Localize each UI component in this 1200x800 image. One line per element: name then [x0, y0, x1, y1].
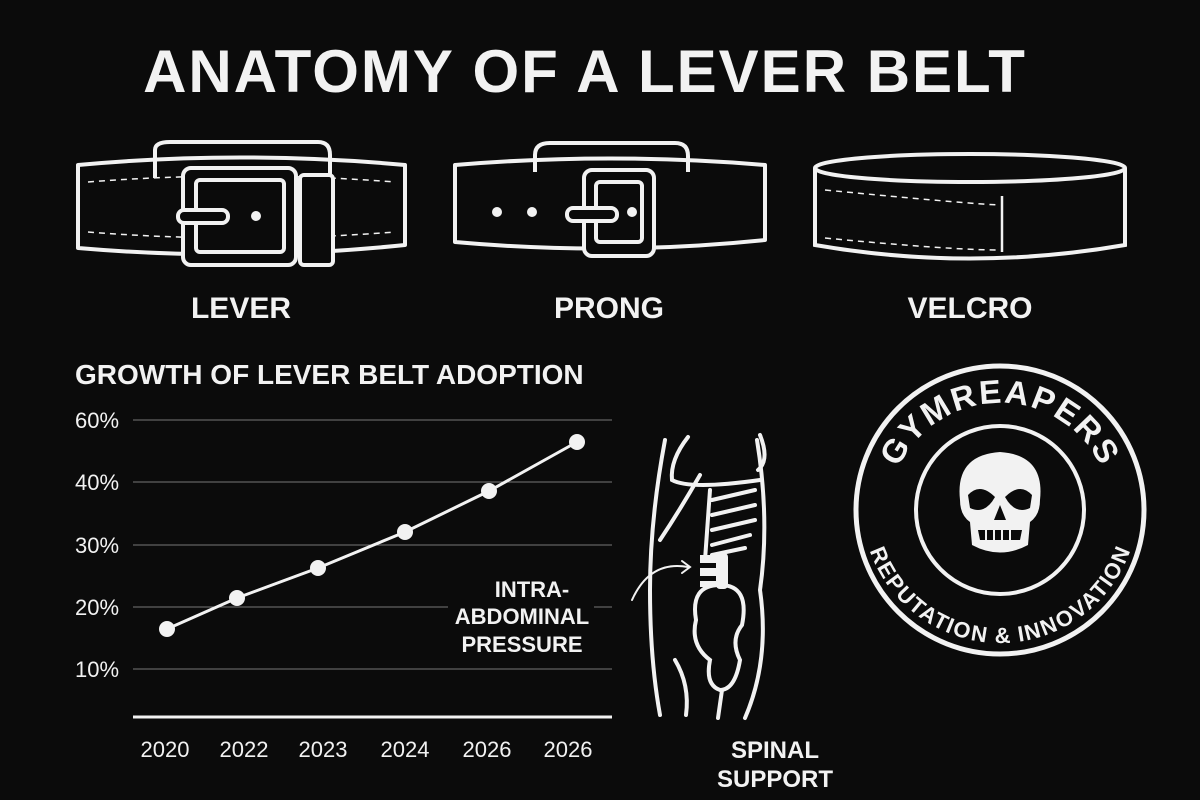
line chart: 2026 [544, 737, 592, 762]
label: spinal support: SUPPORT [717, 766, 833, 793]
label: velcro: VELCRO [907, 292, 1033, 325]
line chart: 40% [75, 470, 119, 495]
line chart: 30% [75, 533, 119, 558]
line chart: 60% [75, 408, 119, 433]
logo: gymreapers badge: REPUTATION & INNOVATION [870, 546, 1130, 644]
line chart: 10% [75, 657, 119, 682]
logo: gymreapers badge: GYMREAPERS [882, 380, 1118, 463]
logo: gymreapers badge [854, 364, 1146, 656]
line chart: 2023 [299, 737, 347, 762]
icon: velcro belt [815, 154, 1125, 258]
line chart: 2026 [463, 737, 511, 762]
line chart: 20% [75, 595, 119, 620]
icon: vertebrae [700, 553, 728, 589]
chart title: GROWTH OF LEVER BELT ADOPTION [75, 359, 584, 390]
callout: intra-abdominal pressure [448, 573, 594, 663]
label: spinal support [717, 737, 833, 793]
label: spinal support: SPINAL [731, 737, 819, 764]
icon: skull [960, 452, 1040, 552]
title: ANATOMY OF A LEVER BELT [143, 38, 1027, 105]
line chart: 2024 [381, 737, 429, 762]
callout: intra-abdominal pressure: INTRA- [495, 577, 569, 602]
icon: prong belt [455, 143, 765, 256]
icon: torso with spine [632, 435, 765, 718]
icon: lever belt [78, 142, 405, 265]
label: prong: PRONG [554, 292, 664, 325]
label: lever: LEVER [191, 292, 291, 325]
line chart: 2020 [141, 737, 189, 762]
callout: intra-abdominal pressure: ABDOMINAL [455, 604, 589, 629]
line chart [75, 408, 612, 762]
line chart: 2022 [220, 737, 268, 762]
callout: intra-abdominal pressure: PRESSURE [461, 632, 583, 657]
